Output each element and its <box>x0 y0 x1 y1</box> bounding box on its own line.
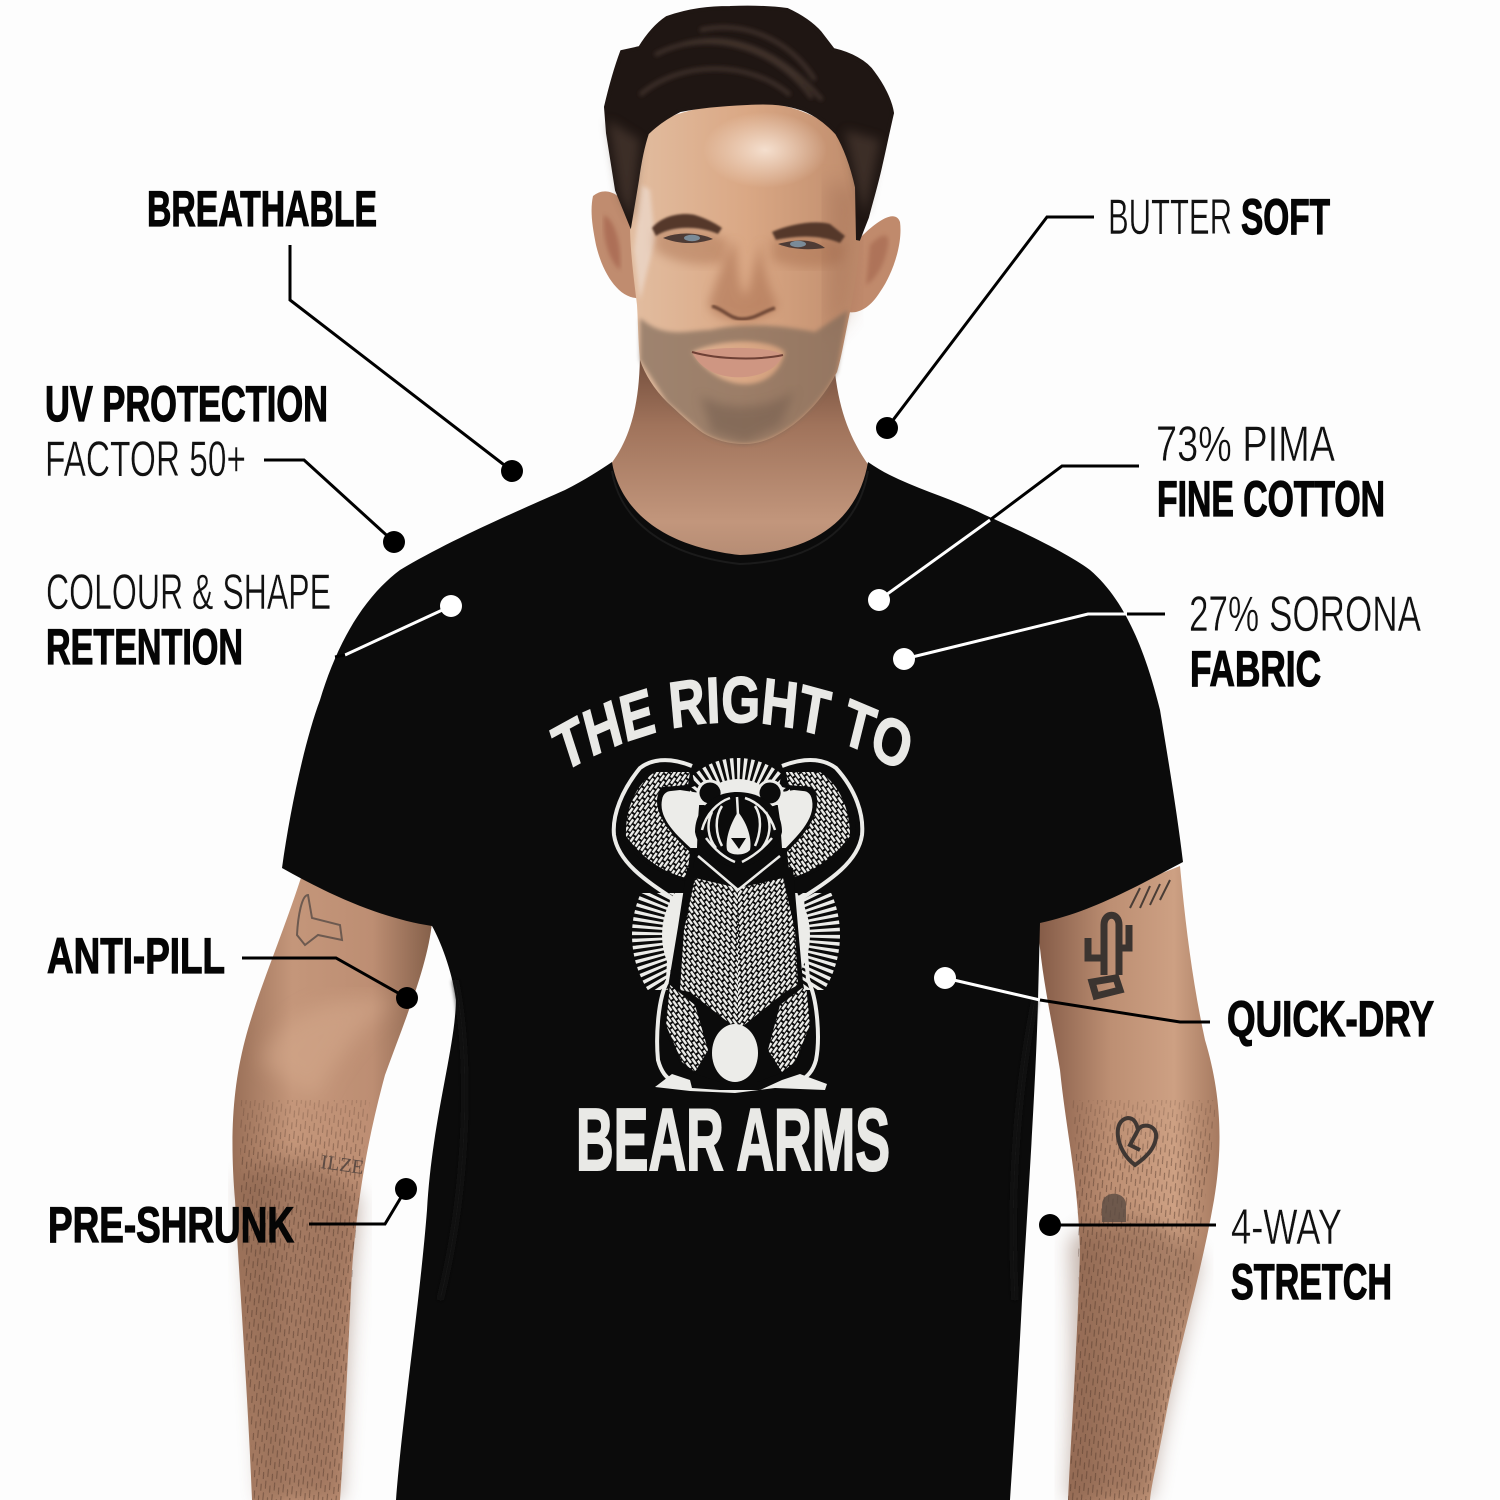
head fur <box>702 797 775 862</box>
snout <box>727 812 750 854</box>
shirt folds <box>440 980 1035 1300</box>
callout: pre-shrunk: PRE-SHRUNK <box>48 1197 294 1253</box>
man: photographic model wearing the shirt <box>232 8 1220 1500</box>
callout: quick-dry <box>934 967 1434 1047</box>
right arm fur <box>786 772 850 878</box>
top sunburst rays <box>690 758 790 805</box>
belly patch <box>712 1024 758 1082</box>
chest fur right <box>738 878 798 1030</box>
left arm fur <box>626 772 690 878</box>
callout: butter soft: SOFT <box>1241 189 1330 245</box>
t-shirt body and sleeves <box>282 462 1183 1500</box>
iris right <box>790 241 806 247</box>
callout: 4-way stretch: STRETCH <box>1231 1254 1392 1310</box>
callout: 27% sorona fabric: FABRIC <box>1190 641 1321 697</box>
callout: colour and shape retention: RETENTION <box>46 619 243 675</box>
nostril shadow <box>712 306 775 319</box>
chest fur left <box>680 878 738 1030</box>
chest V highlight <box>698 856 780 890</box>
temple highlight <box>634 185 655 300</box>
callout: UV protection: UV PROTECTION <box>45 376 328 432</box>
forehead highlight <box>703 112 827 188</box>
callout: butter soft: BUTTER <box>1108 189 1232 245</box>
callout: 4-way stretch: 4-WAY <box>1231 1199 1342 1255</box>
callout: 73% pima fine cotton <box>868 416 1385 611</box>
face <box>630 102 860 444</box>
callout: anti-pill <box>47 928 418 1009</box>
callout: breathable <box>147 181 523 482</box>
eye left <box>663 234 713 243</box>
tattoo: small figure <box>1102 1194 1126 1222</box>
callout: pre-shrunk <box>48 1178 417 1253</box>
right ear <box>848 216 900 312</box>
arched slogan: THE RIGHT TO <box>549 676 910 768</box>
left arm <box>232 865 432 1500</box>
left ear inner <box>604 215 620 270</box>
hair strands <box>640 27 822 100</box>
right arm <box>1038 866 1220 1500</box>
callout: breathable: BREATHABLE <box>147 181 377 237</box>
eyebrow left <box>652 214 722 236</box>
lips <box>692 348 783 377</box>
ears <box>698 781 782 805</box>
ground and paws <box>655 1074 827 1093</box>
bear outline <box>614 760 862 1085</box>
callout: 27% sorona fabric <box>893 586 1421 697</box>
hair <box>606 8 892 240</box>
callout: UV protection <box>45 376 405 553</box>
side sunburst rays <box>632 893 840 990</box>
neck <box>606 350 872 565</box>
eyebrow right <box>772 222 845 243</box>
gaps between arms and head <box>660 790 814 848</box>
callout: 73% pima fine cotton: FINE COTTON <box>1157 471 1385 527</box>
sideburn tone <box>608 120 880 220</box>
right ear inner <box>866 236 888 285</box>
leg fur right <box>768 985 810 1072</box>
tattoo: cactus <box>1088 915 1129 996</box>
tattoo: heart <box>1118 1118 1156 1165</box>
shirt collar <box>612 471 868 564</box>
callout: colour and shape retention: COLOUR & SHAPE <box>46 564 331 620</box>
callout: 4-way stretch <box>1039 1199 1392 1310</box>
tattoo: feather lines <box>1130 880 1170 908</box>
callout: butter soft <box>876 189 1330 439</box>
bottom slogan: BEAR ARMS <box>576 1090 890 1189</box>
chin stubble <box>700 390 795 442</box>
right cheek shading <box>825 180 860 340</box>
leg fur left <box>666 985 708 1072</box>
stubble beard <box>640 310 848 444</box>
left arm: ILZE <box>319 1151 365 1179</box>
callout: UV protection: FACTOR 50+ <box>45 431 246 487</box>
nose shading <box>708 240 778 322</box>
left arm <box>620 770 695 882</box>
lip line <box>692 352 783 358</box>
callout: anti-pill: ANTI-PILL <box>47 928 225 984</box>
callout: 73% pima fine cotton: 73% PIMA <box>1156 416 1335 472</box>
iris left <box>684 235 700 241</box>
body <box>663 868 810 1082</box>
callout: colour and shape retention <box>46 564 462 675</box>
eye socket shading <box>655 228 845 267</box>
nose <box>731 838 746 849</box>
shirt graphic: The Right To Bear Arms bear <box>549 644 961 1189</box>
left ear <box>592 191 640 298</box>
right arm <box>779 770 855 882</box>
eye right <box>778 241 825 249</box>
head <box>695 792 782 868</box>
